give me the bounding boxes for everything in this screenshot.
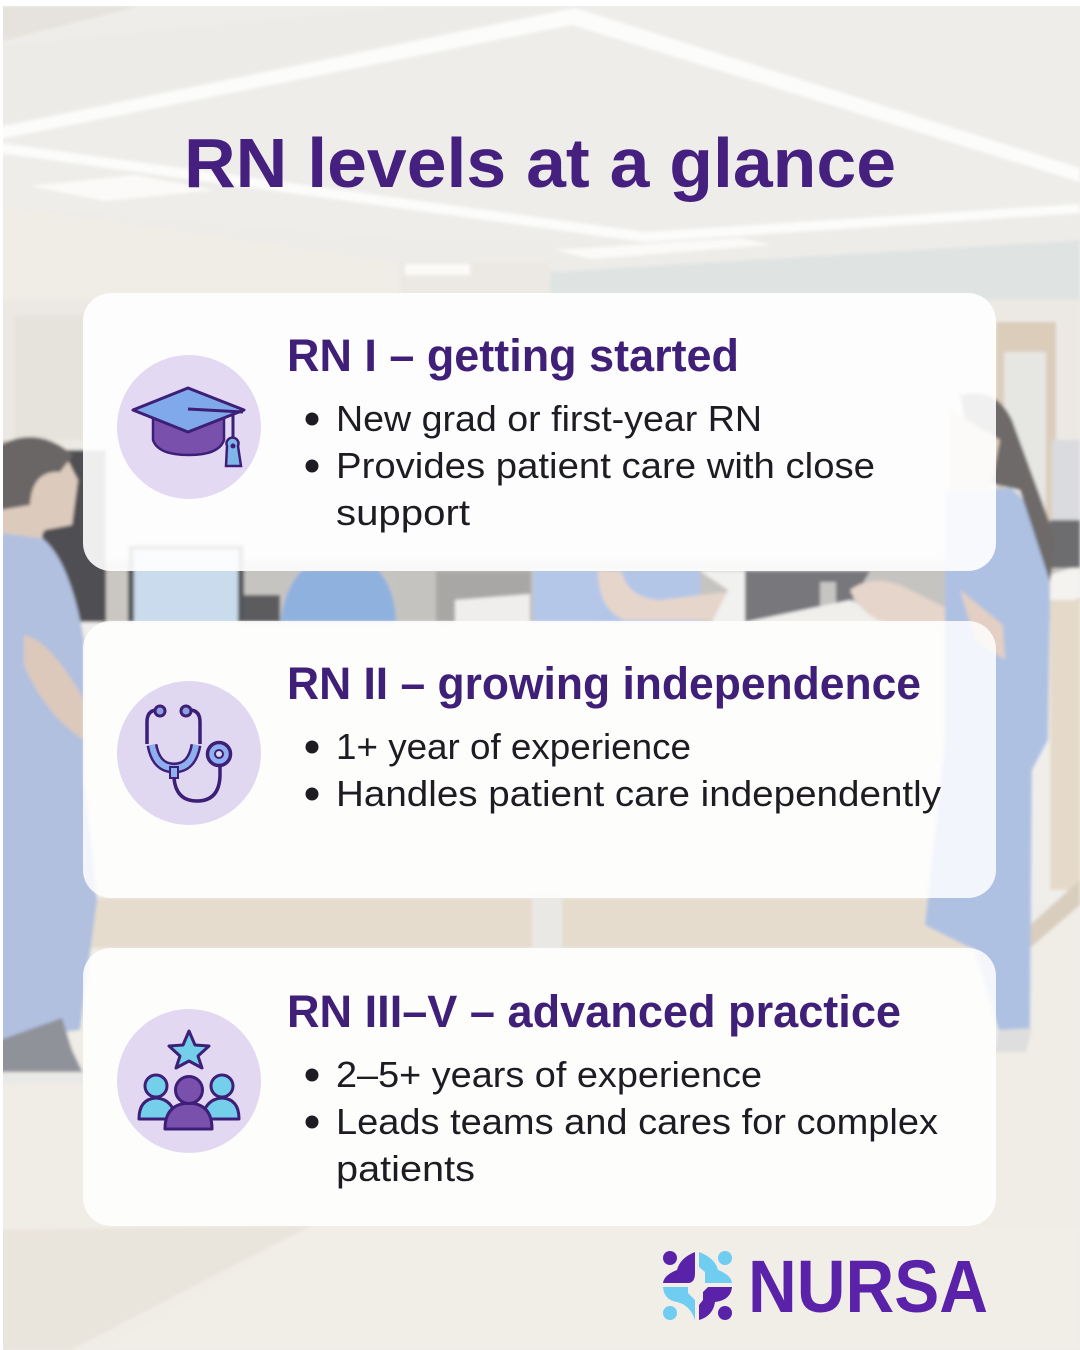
bullet list: RN III-V: 2–5+ years of experience [336,1054,762,1095]
ceiling [0,0,1080,300]
walls behind desk [8,300,1080,452]
bullet list: RN I: New grad or first-year RN [336,398,762,439]
logo: NURSA [663,1245,988,1328]
icon: team with star [117,1009,261,1153]
panel: RN II [83,621,996,898]
icon: graduation cap [117,355,261,499]
bullet list: RN II: Handles patient care independently [336,773,941,814]
panel: RN III-V [83,948,996,1226]
heading: RN I: RN I – getting started [287,330,739,381]
bullet list: RN III-V: patients [336,1148,475,1189]
bullet list: RN I: Provides patient care with close [336,445,875,486]
bullet list: RN III-V [306,1054,938,1189]
bullet list: RN I: support [336,492,470,533]
icon: stethoscope [117,681,261,825]
floor [69,930,1052,1059]
logo mark [663,1251,732,1320]
desk [78,619,756,632]
ceiling light strips [0,8,1080,182]
upper wall [0,205,400,300]
bullet list: RN III-V: Leads teams and cares for complex [336,1101,938,1142]
left nurse [0,533,97,1040]
heading: RN III-V: RN III–V – advanced practice [287,986,901,1037]
title: RN levels at a glance [184,124,896,202]
heading: RN II: RN II – growing independence [287,658,921,709]
right nurse [925,488,1050,1035]
logo wordmark: NURSA [748,1245,988,1328]
panel: RN I [83,293,996,571]
strip between cards 1 and 2 [104,566,1080,621]
bullet list: RN II [306,726,941,814]
bullet list: RN I [306,398,875,533]
bullet list: RN II: 1+ year of experience [336,726,691,767]
